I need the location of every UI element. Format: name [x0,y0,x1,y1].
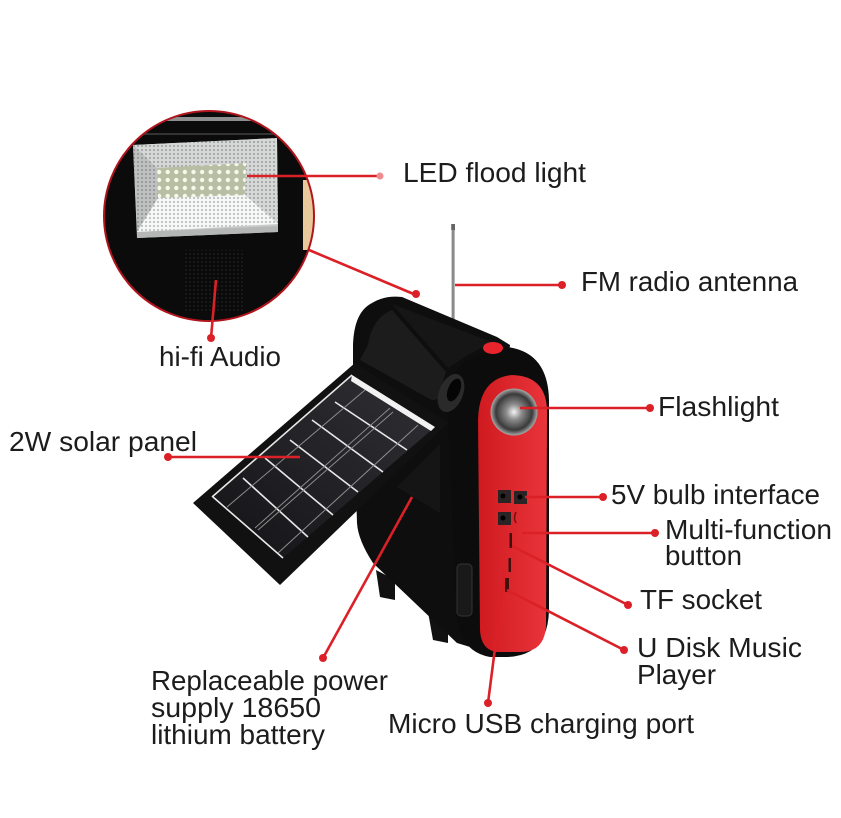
red power button [483,342,503,354]
rear feet [376,570,395,600]
antenna [451,224,455,376]
leader line: FM antenna [455,281,566,289]
label: FM radio antenna: FM radio antenna [581,266,799,297]
back shell and handle [353,297,510,650]
leader line: circle to handle [309,250,420,298]
leader line: solar panel [164,453,300,461]
leader line: battery [319,497,412,662]
label: TF socket: TF socket [640,584,762,615]
label: Micro USB charging port: Micro USB charging port [388,708,694,739]
leader line: 5V bulb interface [525,493,607,501]
LED array [157,163,246,198]
label: Replaceable power supply 18650 lithium battery [151,665,388,750]
red front panel [478,375,547,652]
leader line: TF socket [512,546,632,609]
tan background sliver [303,180,313,250]
leader line: hi-fi audio [207,280,216,342]
label: U Disk Music Player: U Disk Music [637,632,802,663]
label: hi-fi Audio: hi-fi Audio [159,341,281,372]
leader line: multi-function button [522,529,659,537]
leader line: U disk [507,590,628,654]
label: Multi-function button [665,514,832,571]
bright top bus strip [351,375,435,431]
back cover panel [397,444,440,513]
label: Multi-function button: Multi-function [665,514,832,545]
label: LED flood light: LED flood light [403,157,586,188]
label: Multi-function button: button [665,540,742,571]
label: Replaceable power supply 18650 lithium battery: supply 18650 [151,692,321,723]
label: Replaceable power supply 18650 lithium battery: Replaceable power [151,665,388,696]
antenna socket [432,370,470,416]
label: U Disk Music Player: Player [637,659,716,690]
handle recess [360,310,446,400]
inset circle: LED flood light and speaker close-up [104,111,315,321]
front shell [448,347,549,657]
flashlight [490,388,538,436]
device body [353,297,549,657]
side battery latch [457,564,472,616]
flood light housing [133,138,278,238]
speaker grille [183,250,243,312]
label: Replaceable power supply 18650 lithium battery: lithium battery [151,719,325,750]
handle top face [392,304,492,368]
ports [498,490,527,592]
solar panel [193,363,448,585]
label: U Disk Music Player [637,632,802,690]
label: 5V bulb interface: 5V bulb interface [611,479,820,510]
leader line: flashlight [520,404,654,412]
label: Flashlight: Flashlight [658,391,779,422]
label: 2W solar panel: 2W solar panel [9,426,197,457]
leader line: micro USB [484,570,505,707]
leader line: LED flood light [247,172,384,180]
